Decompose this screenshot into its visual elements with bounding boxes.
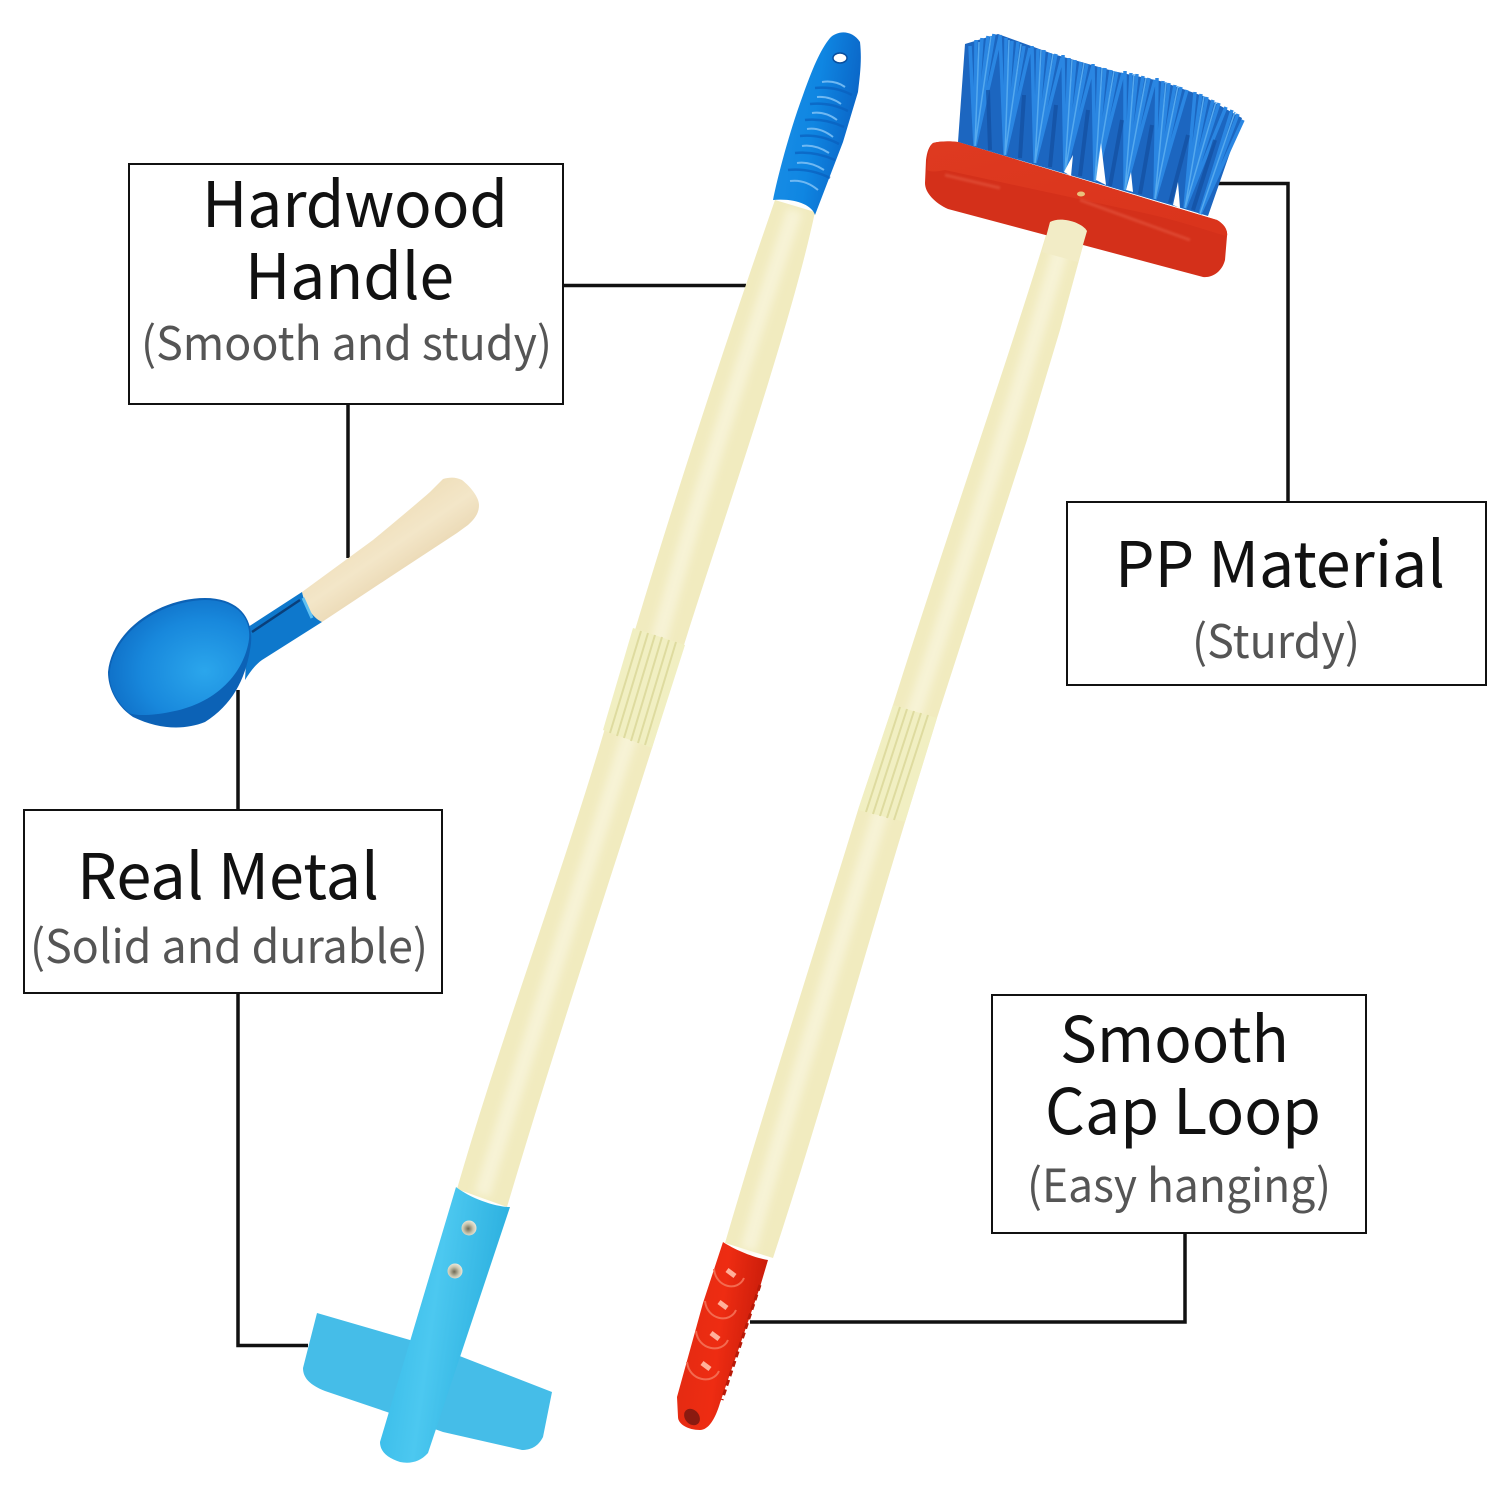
label: Smooth Cap Loop: (Easy hanging) [1027,1150,1331,1216]
broom tool [677,34,1243,1430]
scoop metal neck [245,592,322,680]
hoe rivets [448,1220,476,1278]
label: PP Material: (Sturdy) [1192,606,1360,672]
hoe handle ribbed sleeve [603,628,685,748]
label: Real Metal [24,810,442,993]
broom bristles [958,34,1243,216]
connector: Real Metal to scoop [236,690,240,810]
hoe tool [303,32,861,1463]
scoop tool [108,478,479,727]
hoe wooden handle [457,200,815,1207]
hoe metal blade [303,1313,552,1450]
broom red end grip [677,1242,768,1430]
label: Real Metal: (Solid and durable) [30,911,428,977]
label: Hardwood Handle: (Smooth and study) [141,308,552,374]
scoop wooden handle [302,478,479,622]
broom handle ribbed sleeve [858,705,937,822]
label: PP Material: PP Material [1115,515,1445,606]
label: Smooth Cap Loop: Smooth [1060,990,1289,1081]
label: Hardwood Handle [129,155,563,404]
hoe metal tube [380,1187,510,1463]
connector: Hardwood Handle to long handle [563,284,746,287]
connector: Hardwood Handle to scoop handle [346,404,350,558]
broom red block [925,141,1227,277]
label: Smooth Cap Loop: Cap Loop [1045,1062,1321,1153]
scoop bowl interior [110,600,249,715]
scoop metal body [108,598,251,727]
label: PP Material [1067,502,1486,685]
label: Smooth Cap Loop [992,990,1366,1233]
connector: Real Metal to hoe blade [238,993,308,1346]
connector: PP Material to brush bristles [1218,184,1288,502]
label: Hardwood Handle: Hardwood [202,155,508,246]
label: Real Metal: Real Metal [77,827,379,918]
connector: Smooth Cap Loop to red grip [750,1233,1185,1322]
broom handle end over block [1042,220,1087,262]
broom wooden handle [725,220,1087,1258]
label: Hardwood Handle: Handle [245,227,454,318]
hoe blue top grip [773,32,861,215]
